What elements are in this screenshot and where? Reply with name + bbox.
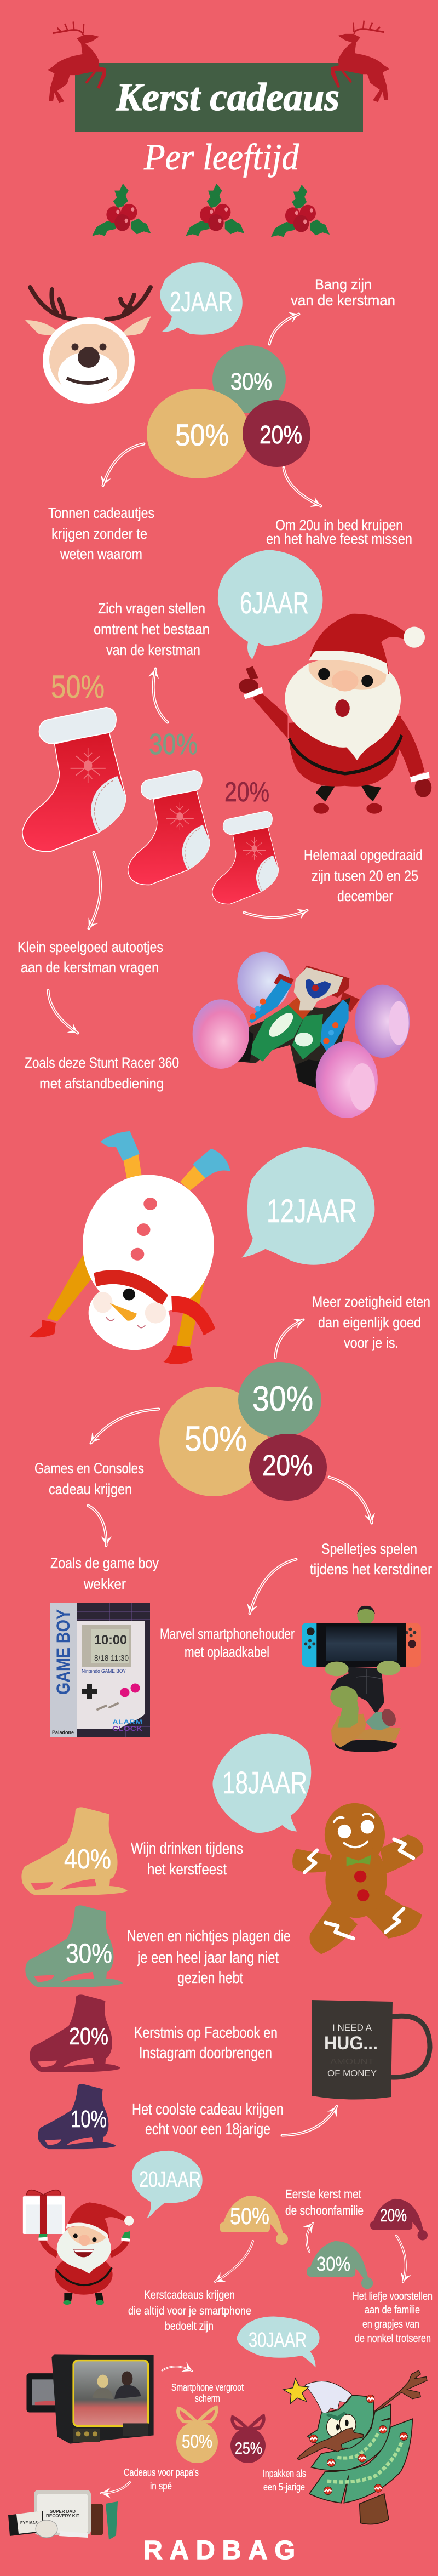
- bubble: 30%: 30%: [252, 1379, 313, 1418]
- product: smartphone tv projector: [26, 2354, 154, 2444]
- arrow down from large stocking: [89, 852, 101, 928]
- text: Spelletjes spelen: Spelletjes spelen: [321, 1541, 417, 1557]
- speech bubble: 6JAAR: [218, 550, 322, 659]
- text: Cadeaus voor papa's: Cadeaus voor papa's: [124, 2467, 199, 2478]
- text: Kerstmis op Facebook: Instagram doorbrengen: [139, 2044, 272, 2062]
- text: Neven en nichtjes: [127, 1928, 291, 1987]
- text: Om 20u in bed: en het halve feest missen: [266, 531, 412, 547]
- text: Zoals de game boy: Zoals de game boy: [50, 1555, 159, 1571]
- text: Bang zijn: [291, 276, 395, 309]
- text: Eerste kerst: de schoonfamilie: [285, 2203, 364, 2218]
- text: Zich vragen stellen: [94, 600, 210, 658]
- text: Helemaal opgedraaid: [304, 847, 423, 904]
- text: Smartphone vergroot: Smartphone vergroot: [171, 2382, 244, 2393]
- text: Marvel smartphonehouder: met oplaadkabel: [185, 1644, 269, 1660]
- panel: 20 jaar: [23, 2151, 433, 2345]
- panel: 12 jaar: [30, 1131, 432, 1752]
- icon: hat 30%: [307, 2241, 373, 2289]
- subtitle: Per leeftijd: Per leeftijd: [143, 136, 299, 178]
- speech bubble: 2JAAR: 2JAAR: [170, 286, 233, 318]
- product: game boy alarm clock: GAME BOY: [53, 1609, 74, 1695]
- bubble: 30%: [212, 345, 286, 413]
- arrow to 20% text: [284, 468, 321, 506]
- product: game boy alarm clock: ALARM: [112, 1718, 142, 1726]
- product: I need a hug mug: I NEED A: [332, 2022, 372, 2033]
- icon: skate 30%: 30%: [66, 1938, 112, 1969]
- text: Inpakken als: Inpakken als: [263, 2468, 306, 2479]
- icon: reindeer left: [48, 22, 106, 103]
- text: Helemaal opgedraaid: december: [337, 888, 393, 904]
- text: Meer zoetigheid: voor je is.: [344, 1335, 399, 1351]
- text: Marvel smartphonehouder: Marvel smartphonehouder: [160, 1626, 295, 1642]
- icon: hat 50%: 50%: [230, 2203, 269, 2230]
- title banner: [75, 63, 363, 132]
- text: Meer zoetigheid: dan eigenlijk goed: [318, 1314, 421, 1331]
- text: Bang zijn: Bang zijn: [315, 276, 372, 293]
- icon: skate 10%: 10%: [71, 2106, 107, 2133]
- text: Neven en nichtjes: Neven en nichtjes plagen die: [127, 1928, 291, 1945]
- speech bubble: 20JAAR: 20JAAR: [139, 2167, 201, 2192]
- text: Smartphone vergroot: [171, 2382, 244, 2404]
- text: Zoals de game boy: wekker: [83, 1576, 126, 1592]
- text: Neven en nichtjes: gezien hebt: [177, 1969, 243, 1987]
- text: Kerstcadeaus krijgen: die altijd voor je smartphone: [128, 2305, 251, 2317]
- icon: gingerbread man: [292, 1803, 423, 1954]
- bubble: 20%: [249, 1434, 327, 1501]
- icon: skate 20%: 20%: [69, 2023, 108, 2050]
- icon: skate 20%: [30, 1994, 121, 2072]
- text: Smartphone vergroot: scherm: [195, 2393, 220, 2404]
- icon: dabbing christmas tree: [283, 2370, 427, 2524]
- icon: holly 2: [186, 184, 244, 236]
- arrow to Eerste kerst: [307, 2223, 313, 2252]
- text: Games en Consoles: cadeau krijgen: [49, 1481, 132, 1497]
- icon: stunt racer car: [193, 952, 410, 1118]
- text: Marvel smartphonehouder: [160, 1626, 295, 1660]
- text: Het liefje: en grapjes van: [362, 2318, 419, 2330]
- text: Stunt Racer: Zoals deze Stunt Racer 360: [25, 1055, 179, 1071]
- arrow to Het liefje: [396, 2236, 406, 2282]
- percent labels: [175, 368, 302, 452]
- speech bubble: 20JAAR: [132, 2151, 203, 2219]
- text: Meer zoetigheid: [312, 1293, 430, 1351]
- icon: skate 10%: [38, 2084, 116, 2149]
- text: Het liefje: aan de familie: [365, 2304, 420, 2316]
- text: Helemaal opgedraaid: zijn tusen 20 en 25: [312, 868, 418, 884]
- product: super dad recovery kit: RECOVERY KIT: [46, 2514, 79, 2518]
- bubble: 50%: 50%: [185, 1419, 247, 1458]
- text: Kerstcadeaus krijgen: [128, 2289, 251, 2333]
- speech bubble: 18JAAR: 18JAAR: [222, 1765, 307, 1800]
- icon: ornament 25%: [230, 2416, 266, 2463]
- arrow to Marvel: [250, 1559, 296, 1614]
- product: super dad recovery kit: EYE MAS: [20, 2521, 38, 2526]
- text: Om 20u in bed: Om 20u in bed kruipen: [275, 517, 403, 533]
- text: Cadeaus voor papa's: [124, 2467, 199, 2492]
- icon: ornament 50%: 50%: [182, 2431, 212, 2452]
- text: Games en Consoles: [34, 1460, 144, 1497]
- icon: large stocking: [22, 708, 126, 852]
- product: game boy alarm clock: CLOCK: [112, 1725, 142, 1732]
- text: Tonnen cadeautjes: [48, 505, 154, 562]
- text: Stunt Racer: met afstandbediening: [39, 1075, 164, 1092]
- arrow to Smartphone: [162, 2367, 192, 2371]
- text: Kerstcadeaus krijgen: Kerstcadeaus krijgen: [144, 2289, 235, 2301]
- icon: holly 3: [271, 185, 330, 237]
- text: Het coolste cadeau: Het coolste cadeau krijgen: [132, 2101, 284, 2118]
- text: Spelletjes spelen: [310, 1541, 432, 1577]
- text: Inpakken als: [263, 2468, 306, 2493]
- banner rectangle: [75, 63, 363, 132]
- speech bubble: 12JAAR: 12JAAR: [267, 1193, 357, 1229]
- text: Om 20u in bed: [266, 517, 412, 547]
- product: game boy alarm clock: [50, 1603, 150, 1737]
- panel: 30 jaar: [8, 2317, 427, 2540]
- stockings: [22, 708, 279, 904]
- text: Tonnen cadeautjes: Tonnen cadeautjes: [48, 505, 154, 521]
- speech bubble: 12JAAR: [241, 1147, 374, 1265]
- speech bubble: 6JAAR: 6JAAR: [240, 586, 309, 620]
- product: super dad recovery kit: SUPER DAD: [50, 2509, 76, 2514]
- icon: hat 30%: 30%: [316, 2253, 350, 2275]
- arrow up to Zich vragen: [153, 669, 168, 722]
- arrow to Meer zoetigheid: [275, 1320, 303, 1358]
- text: Het coolste cadeau: [132, 2101, 284, 2138]
- percent labels: 30%: [230, 368, 272, 395]
- icon: reindeer right: [331, 21, 390, 102]
- icon: snowman doing a cartwheel: [30, 1131, 230, 1364]
- percent: 20%: 20%: [224, 777, 269, 807]
- arrow to Spelletjes: [329, 1477, 372, 1523]
- text: Het liefje: [353, 2290, 433, 2345]
- arrow to Kerstcadeaus: [215, 2241, 253, 2282]
- icon: ornament 25%: 25%: [235, 2440, 262, 2458]
- percent: 50%: 50%: [51, 669, 105, 705]
- icon: holly 1: [92, 184, 151, 236]
- text: Zich vragen stellen: van de kerstman: [106, 642, 200, 658]
- text: Kerstmis op Facebook: Kerstmis op Facebook en: [134, 2024, 278, 2042]
- percent: 30%: 30%: [149, 728, 198, 761]
- text: Eerste kerst: [285, 2187, 364, 2218]
- product: game boy alarm clock: Paladone: [52, 1730, 74, 1735]
- logo: RADBAG: RADBAG: [143, 2536, 295, 2565]
- speech bubble: 30JAAR: 30JAAR: [249, 2329, 307, 2352]
- icon: reindeer face: [25, 287, 151, 404]
- speech bubble: 30JAAR: [237, 2317, 320, 2367]
- panel: 2 jaar: [25, 262, 412, 562]
- bubble: 50%: [159, 1387, 268, 1496]
- text: Kerstmis op Facebook: [134, 2024, 278, 2062]
- text: Tonnen cadeautjes: krijgen zonder te: [51, 526, 147, 542]
- percent labels: 50%: [175, 418, 229, 452]
- arrow to Stunt Racer: [48, 990, 78, 1033]
- icon: holly row: [92, 184, 330, 237]
- icon: hat 50%: [220, 2196, 288, 2245]
- text: Inpakken als: een 5-jarige: [263, 2482, 305, 2493]
- speech bubble: 18JAAR: [212, 1733, 311, 1833]
- text: Cadeaus voor papa's: in spé: [150, 2481, 172, 2492]
- icon: skate 30%: [25, 1905, 123, 1987]
- arrow to 50% text: [103, 444, 144, 486]
- arrow to dad kit: [101, 2482, 130, 2493]
- text: Klein speelgoed: aan de kerstman vragen: [21, 959, 159, 976]
- product: game boy alarm clock: 10:00: [94, 1633, 127, 1648]
- icon: small stocking: [212, 811, 279, 904]
- product: I need a hug mug: HUG...: [324, 2033, 378, 2054]
- text: Het coolste cadeau: echt voor een 18jarige: [145, 2121, 270, 2138]
- product: I need a hug mug: AMOUNT: [330, 2057, 374, 2066]
- panel: 18 jaar: [21, 1733, 430, 2149]
- arrow to Games en Consoles: [91, 1409, 159, 1443]
- bubble: 50%: [147, 389, 250, 478]
- product: super dad recovery kit: [8, 2490, 118, 2540]
- text: Tonnen cadeautjes: weten waarom: [60, 546, 142, 562]
- icon: skate 40%: 40%: [64, 1844, 111, 1874]
- icon: hat 20%: 20%: [380, 2205, 407, 2225]
- panel: 6 jaar: [18, 550, 431, 1118]
- text: Zich vragen stellen: Zich vragen stellen: [98, 600, 205, 617]
- text: Games en Consoles: Games en Consoles: [34, 1460, 144, 1477]
- arrow to mug: [282, 2106, 337, 2135]
- heading: Kerst cadeaus: Kerst cadeaus: [116, 75, 339, 119]
- text: Stunt Racer: [25, 1055, 179, 1092]
- product: game boy alarm clock: Nintendo GAME BOY: [82, 1668, 126, 1674]
- icon: skate 40%: [21, 1807, 128, 1895]
- icon: santa with gift: [23, 2190, 134, 2305]
- product: I need a hug mug: [312, 2000, 430, 2100]
- text: Zich vragen stellen: omtrent het bestaan: [94, 621, 210, 637]
- product: game boy alarm clock: 8/18 11:30: [94, 1654, 129, 1663]
- product: hulk controller holder with switch: [302, 1606, 421, 1752]
- icon: medium stocking: [128, 771, 210, 885]
- text: Wijn drinken: het kerstfeest: [147, 1861, 227, 1878]
- arrow to game boy text: [88, 1506, 106, 1546]
- product: I need a hug mug: OF MONEY: [327, 2069, 377, 2078]
- arrow right from small stocking: [244, 910, 307, 917]
- text: Wijn drinken: Wijn drinken tijdens: [131, 1840, 243, 1857]
- text: Klein speelgoed: Klein speelgoed autootjes: [18, 939, 163, 955]
- arrow to 30% text: [269, 314, 299, 344]
- text: Kerstcadeaus krijgen: bedoelt zijn: [165, 2320, 214, 2333]
- text: Klein speelgoed: [18, 939, 163, 976]
- text: Neven en nichtjes: je een heel jaar lang niet: [137, 1949, 279, 1967]
- text: Bang zijn: van de kerstman: [291, 292, 395, 309]
- percent labels: 20%: [260, 420, 302, 449]
- text: Wijn drinken: [131, 1840, 243, 1878]
- bubble: 30%: [238, 1362, 321, 1438]
- text: Eerste kerst: Eerste kerst met: [285, 2187, 362, 2201]
- speech bubble: 2JAAR: [160, 262, 243, 335]
- icon: santa pointing: [239, 614, 431, 814]
- bubble: 20%: [243, 400, 310, 467]
- text: Zoals de game boy: [50, 1555, 159, 1592]
- bubble: 20%: 20%: [262, 1449, 313, 1482]
- icon: hat 20%: [370, 2199, 428, 2240]
- icon: ornament 50%: [176, 2407, 218, 2463]
